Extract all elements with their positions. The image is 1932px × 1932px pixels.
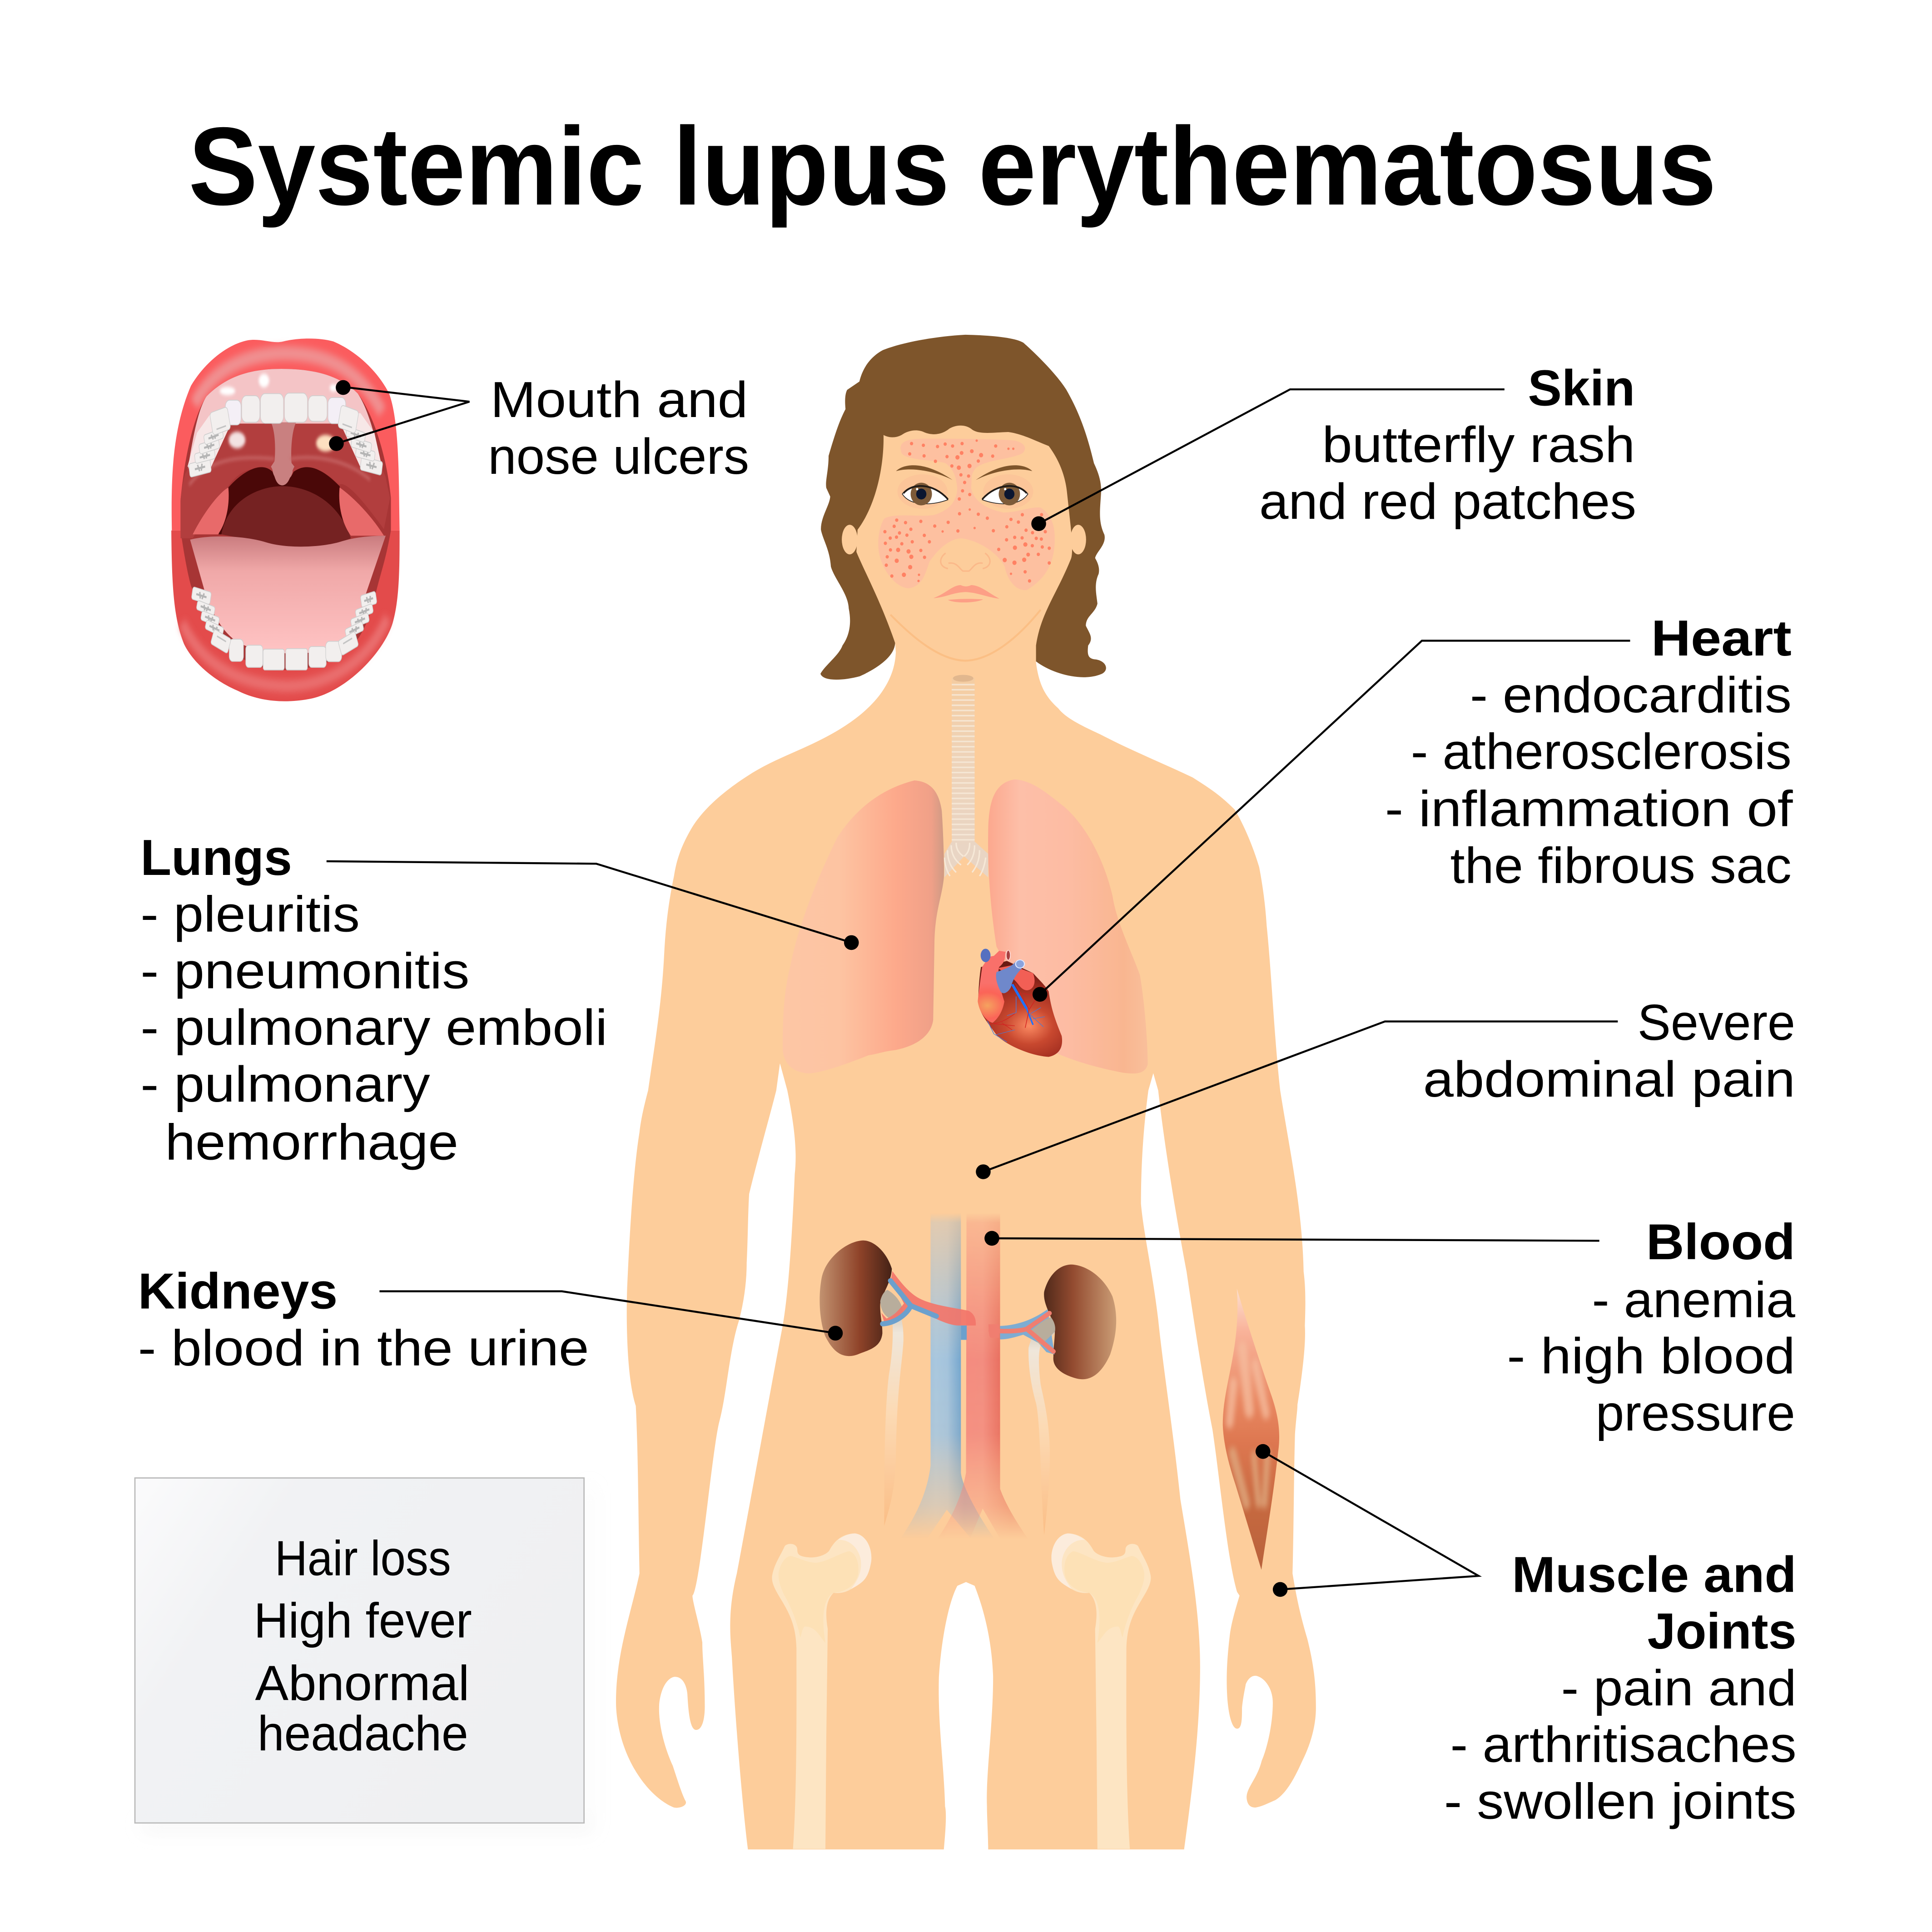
panel background xyxy=(135,1478,584,1823)
coronary vessels fine xyxy=(988,983,1036,1030)
vena cava xyxy=(905,1215,990,1535)
text: abdominal pain xyxy=(1423,994,1795,1108)
panel: other symptoms xyxy=(135,1478,591,1831)
leader: lungs xyxy=(327,861,859,950)
back of throat xyxy=(221,486,351,547)
tongue groove xyxy=(278,553,286,631)
vessel opening xyxy=(1016,960,1024,968)
right renal vein xyxy=(1000,1309,1054,1355)
text: mouth and nose ulcers: Mouth and xyxy=(491,371,748,428)
aorta xyxy=(943,1216,1024,1533)
text: lungs: Lungs xyxy=(140,829,292,886)
upper molars left xyxy=(188,407,231,477)
femurs xyxy=(772,1534,1151,1849)
mouth cavity xyxy=(180,369,391,670)
left renal pelvis xyxy=(880,1290,903,1320)
right femur xyxy=(1052,1534,1151,1849)
icon: ears xyxy=(842,525,1086,554)
lower lip highlight xyxy=(182,618,387,686)
muscle highlights xyxy=(1230,1348,1267,1504)
pulmonary artery xyxy=(998,965,1034,990)
upper front teeth xyxy=(225,393,346,425)
right tonsil xyxy=(339,487,384,536)
bronchial rings xyxy=(944,843,986,876)
leader: muscle and joints xyxy=(1256,1444,1479,1597)
coronary branches blue xyxy=(988,996,1045,1042)
abdominal vessels and kidneys xyxy=(819,1213,1116,1539)
text: muscle and joints: - arthritisaches xyxy=(1450,1716,1797,1773)
text: muscle and joints: - swollen joints xyxy=(1444,1773,1797,1829)
text: skin: Skin xyxy=(1528,359,1635,416)
panel text: Abnormal xyxy=(255,1656,469,1711)
text: skin: butterfly rash xyxy=(1322,416,1635,473)
icon: eyebrows xyxy=(896,465,1032,480)
icon: forearm muscle xyxy=(1223,1289,1279,1570)
text: blood: - high blood xyxy=(1507,1327,1795,1384)
ventricles xyxy=(978,961,1062,1057)
icon: left eye xyxy=(902,483,948,505)
text: blood: pressure xyxy=(1596,1385,1795,1441)
text: mouth and nose ulcers: nose ulcers xyxy=(488,428,749,485)
chin line xyxy=(890,610,1041,661)
leader: abdominal pain xyxy=(976,1022,1618,1179)
text: heart: Heart xyxy=(1651,610,1792,666)
lower lip xyxy=(171,531,400,701)
right lung xyxy=(988,780,1148,1073)
panel shadow xyxy=(139,1484,591,1831)
lungs xyxy=(783,780,1148,1073)
text: skin: and red patches xyxy=(1259,473,1636,530)
text: abdominal pain: abdominal pain xyxy=(1423,1051,1795,1108)
trachea xyxy=(944,675,988,877)
leader: kidneys xyxy=(379,1291,843,1341)
leader: heart xyxy=(1033,641,1630,1002)
text: blood xyxy=(1507,1213,1795,1441)
lower molars left xyxy=(191,586,231,654)
leader: mouth and nose ulcers xyxy=(329,380,469,451)
lower fibres xyxy=(1232,1453,1267,1504)
figure: body silhouette xyxy=(616,653,1316,1849)
text: lungs: - pleuritis xyxy=(140,886,360,943)
superior vena cava small xyxy=(981,949,991,962)
left kidney xyxy=(819,1241,892,1356)
tube xyxy=(944,678,988,877)
icon: hair xyxy=(820,335,1106,680)
text: muscle and joints: Joints xyxy=(1647,1603,1797,1659)
aortic opening xyxy=(1006,950,1010,960)
text: abdominal pain: Severe xyxy=(1638,994,1795,1051)
icon: heart xyxy=(978,949,1062,1057)
text: heart: the fibrous sac xyxy=(1450,837,1792,894)
leader: skin xyxy=(1031,389,1505,531)
text: kidneys xyxy=(138,1263,589,1376)
text: skin xyxy=(1259,359,1636,530)
left renal artery xyxy=(881,1271,976,1326)
text: mouth and nose ulcers xyxy=(488,371,749,485)
text: heart xyxy=(1385,610,1793,894)
upper fibres xyxy=(1230,1348,1266,1423)
palate midline xyxy=(271,422,296,485)
panel text: headache xyxy=(258,1706,468,1761)
icon: eye sockets xyxy=(898,474,1033,509)
cartilage rings xyxy=(959,684,968,842)
text: muscle and joints: Muscle and xyxy=(1512,1546,1797,1603)
tongue xyxy=(190,536,386,653)
posterior palate xyxy=(180,424,390,538)
text: blood: Blood xyxy=(1646,1213,1795,1270)
ulcer left xyxy=(228,432,245,448)
text: lungs xyxy=(140,829,607,1170)
left femur xyxy=(772,1534,871,1849)
top opening xyxy=(953,675,973,682)
left renal vein xyxy=(883,1281,936,1324)
artery stub xyxy=(988,1324,999,1338)
left ureter xyxy=(882,1299,904,1526)
text: lungs: - pulmonary emboli xyxy=(140,999,607,1056)
text: kidneys: - blood in the urine xyxy=(138,1319,589,1376)
icon: open mouth with ulcers xyxy=(171,338,400,701)
icon: nose xyxy=(941,553,990,571)
lower front teeth xyxy=(229,639,342,670)
vein crossing xyxy=(961,1326,967,1340)
muscle body xyxy=(1223,1289,1279,1570)
panel text: Hair loss xyxy=(275,1530,451,1585)
right ureter xyxy=(1028,1318,1056,1535)
throat arch xyxy=(219,467,349,534)
soft palate fold xyxy=(189,457,370,485)
panel text: High fever xyxy=(254,1593,472,1648)
face skin xyxy=(856,426,1072,668)
title: Systemic lupus erythematosus xyxy=(189,104,1716,228)
panel text xyxy=(254,1530,472,1761)
text: lungs: hemorrhage xyxy=(165,1113,458,1170)
right kidney xyxy=(1044,1265,1116,1379)
leader: blood xyxy=(984,1231,1599,1246)
lower molars right xyxy=(338,591,377,656)
text: muscle and joints: - pain and xyxy=(1561,1659,1797,1716)
rash dots xyxy=(883,439,1051,583)
right atrium xyxy=(978,951,1006,1023)
icon: lips xyxy=(934,585,999,602)
blue vessel xyxy=(996,961,1024,993)
upper lip xyxy=(172,338,400,531)
icon: right eye xyxy=(982,483,1028,505)
text: blood: - anemia xyxy=(1592,1271,1795,1328)
text: lungs: - pulmonary xyxy=(140,1056,430,1113)
palate spots xyxy=(220,374,338,395)
text: muscle and joints xyxy=(1444,1546,1797,1829)
text: heart: - atherosclerosis xyxy=(1411,723,1792,780)
text: lungs: - pneumonitis xyxy=(140,942,469,999)
lip highlights xyxy=(194,353,382,412)
left lung xyxy=(783,780,944,1073)
rash patch xyxy=(878,439,1055,590)
right renal pelvis xyxy=(1031,1317,1055,1345)
left tonsil xyxy=(193,487,228,534)
ulcer right xyxy=(316,435,335,452)
uvula xyxy=(271,459,294,486)
text: heart: - inflammation of xyxy=(1385,780,1793,837)
face with butterfly rash xyxy=(842,426,1086,668)
right renal artery xyxy=(991,1313,1053,1351)
text: kidneys: Kidneys xyxy=(138,1263,338,1320)
upper molars right xyxy=(338,405,383,475)
text: heart: - endocarditis xyxy=(1470,666,1792,723)
coronary veins xyxy=(1012,984,1033,1025)
anterior palate xyxy=(188,369,382,472)
